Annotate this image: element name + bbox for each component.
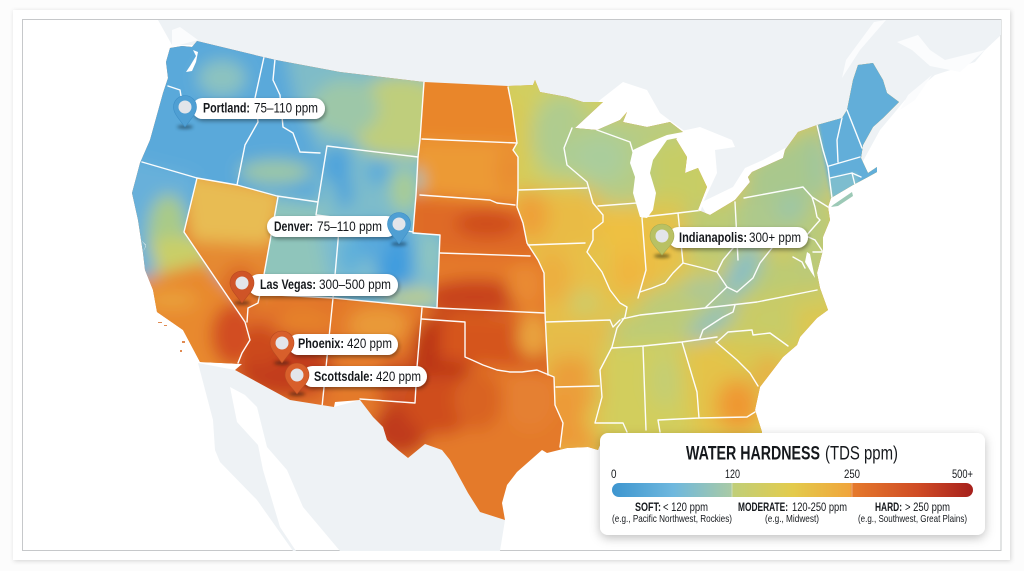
coastal water details: [141, 50, 815, 278]
heat: plains and southwest: [132, 41, 899, 520]
canada coastal channels: [172, 20, 984, 99]
canada landmass: [158, 20, 1001, 215]
pill: [248, 274, 398, 296]
label: Denver: [267, 212, 410, 246]
heat: new england: [816, 63, 899, 200]
label: Indianapolis: [650, 224, 808, 258]
scale ticks: 0: [611, 469, 616, 481]
heat: midwest, south and east: [508, 63, 899, 450]
pin: Denver: [388, 212, 410, 246]
label: Phoenix: [270, 331, 398, 365]
channel islands: [158, 322, 185, 352]
text: Las Vegas:: [260, 277, 316, 292]
pin: Phoenix: [270, 331, 294, 365]
value: 420 ppm: [376, 369, 421, 384]
scale ticks: 120: [725, 469, 740, 481]
label: Portland: [174, 96, 325, 129]
value: 420 ppm: [347, 336, 392, 351]
soft caption: [612, 502, 732, 525]
pill: [302, 366, 427, 387]
state borders: [142, 57, 862, 447]
long island: [831, 192, 853, 207]
moderate caption: MODERATE:: [738, 502, 788, 514]
label: Scottsdale: [285, 363, 427, 396]
pin: Portland: [174, 96, 196, 129]
pin: Las Vegas: [230, 271, 254, 305]
legend panel: [600, 433, 985, 535]
hard caption: (e.g., Southwest, Great Plains): [858, 513, 967, 525]
hard caption: [858, 502, 967, 525]
lake huron: [676, 127, 735, 211]
text: Portland:: [203, 100, 250, 116]
pill: [288, 334, 398, 355]
moderate caption: 120-250 ppm: [792, 502, 847, 514]
mexico landmass: [198, 363, 505, 551]
soft caption: < 120 ppm: [663, 502, 708, 514]
soft caption: (e.g., Pacific Northwest, Rockies): [612, 513, 732, 525]
scale ticks: 250: [844, 469, 860, 481]
heat: northwest and rockies: [132, 41, 440, 364]
moderate caption: (e.g., Midwest): [765, 513, 819, 525]
value: 300+ ppm: [749, 230, 801, 245]
lake michigan: [630, 132, 683, 218]
label: Las Vegas: [230, 271, 398, 305]
pill: [192, 98, 325, 119]
scale ticks: [611, 469, 973, 481]
value: 75–110 ppm: [254, 100, 318, 116]
lake superior: [582, 82, 684, 131]
text: Scottsdale:: [314, 369, 373, 384]
value: 300–500 ppm: [319, 277, 391, 292]
scale ticks: 500+: [952, 469, 973, 481]
legend title: (TDS ppm): [825, 444, 898, 464]
value: 75–110 ppm: [317, 219, 382, 234]
moderate caption: [738, 502, 847, 525]
text: Denver:: [274, 219, 313, 234]
pin: Indianapolis: [650, 224, 674, 258]
hard caption: HARD:: [875, 502, 902, 514]
soft caption: SOFT:: [635, 502, 661, 514]
text: Phoenix:: [298, 336, 344, 351]
hard caption: > 250 ppm: [905, 502, 950, 514]
pin: Scottsdale: [285, 363, 309, 396]
pill: [267, 216, 397, 237]
lakes erie and ontario: [702, 148, 786, 215]
gradient bar: [612, 483, 973, 497]
pill: [668, 227, 808, 248]
legend title: WATER HARDNESS: [686, 444, 820, 464]
text: Indianapolis:: [679, 230, 747, 245]
heat map: [132, 41, 899, 520]
